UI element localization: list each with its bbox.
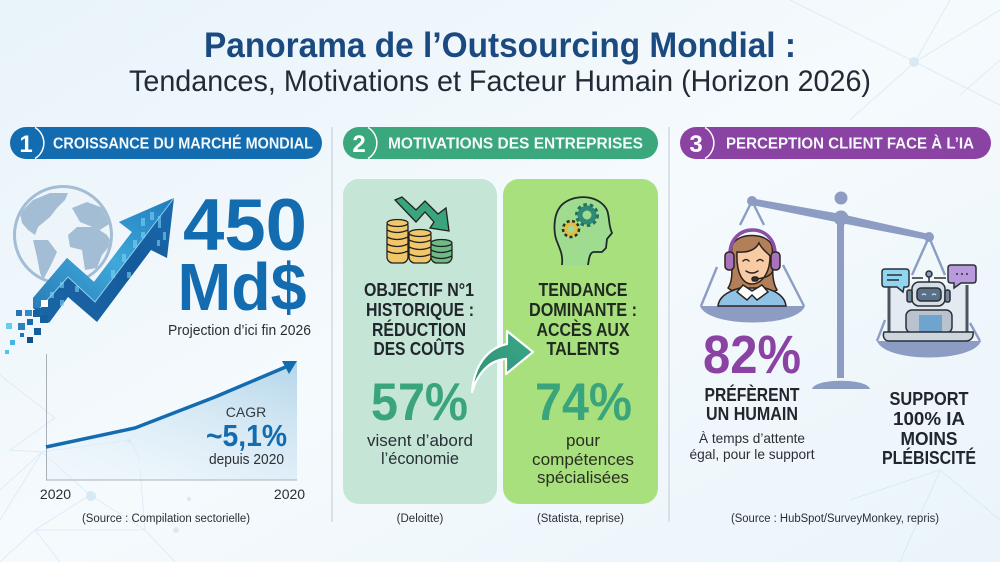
stat: 450 Md$: Projection d’ici fin 2026 bbox=[168, 322, 311, 339]
chart: CAGR growth: depuis 2020 bbox=[209, 452, 284, 468]
text: prefer a human: UN HUMAIN bbox=[706, 404, 798, 424]
header: section 3 bbox=[680, 127, 991, 159]
title bbox=[129, 26, 871, 98]
text: objective: HISTORIQUE : bbox=[366, 300, 474, 320]
text: trend: TALENTS bbox=[546, 339, 620, 359]
stat: 57%: 57% bbox=[371, 373, 468, 432]
source: section 3: (Source : HubSpot/SurveyMonkey, repris) bbox=[731, 513, 939, 525]
stat: 82%: 82% bbox=[703, 325, 801, 385]
header: section 3: PERCEPTION CLIENT FACE À L’IA bbox=[726, 136, 974, 152]
text: objective: DES COÛTS bbox=[374, 338, 464, 359]
chart: CAGR growth: 2020 bbox=[40, 486, 71, 502]
text: 74% description: compétences bbox=[532, 450, 634, 469]
title: Tendances, Motivations et Facteur Humain (Horizon 2026) bbox=[129, 65, 871, 98]
text: 74% description: spécialisées bbox=[537, 468, 629, 487]
chart: CAGR growth: ~5,1% bbox=[206, 418, 287, 453]
stat: 450 Md$: Md$ bbox=[178, 250, 306, 325]
text: prefer a human: égal, pour le support bbox=[690, 446, 815, 462]
text: 57% description: l’économie bbox=[381, 449, 459, 468]
header: section 1 bbox=[10, 127, 322, 159]
header: section 3: 3 bbox=[689, 131, 703, 158]
source: Statista: (Statista, reprise) bbox=[537, 513, 624, 525]
panel: talent access bbox=[503, 179, 658, 504]
chart: balance scale bbox=[700, 192, 981, 389]
text: prefer a human: PRÉFÈRENT bbox=[704, 384, 800, 405]
source: Deloitte: (Deloitte) bbox=[397, 513, 443, 525]
chart: CAGR growth bbox=[40, 354, 305, 502]
stat: 450 Md$: 450 bbox=[183, 185, 307, 266]
icon: human support agent bbox=[718, 230, 786, 306]
text: prefer a human bbox=[690, 384, 815, 462]
header: section 2 bbox=[343, 127, 658, 159]
text: AI support: SUPPORT bbox=[890, 389, 969, 409]
text: objective bbox=[364, 280, 474, 359]
text: trend: ACCÈS AUX bbox=[536, 319, 630, 340]
chart: CAGR growth: 2020 bbox=[274, 486, 305, 502]
icon: rising arrow bbox=[5, 198, 174, 354]
text: objective: OBJECTIF N°1 bbox=[364, 280, 474, 300]
text: 74% description bbox=[532, 431, 634, 487]
stat: 450 Md$ bbox=[168, 185, 311, 339]
text: trend bbox=[529, 280, 637, 359]
chart: CAGR growth: CAGR bbox=[226, 404, 266, 420]
panel: cost reduction bbox=[343, 179, 497, 504]
header: section 1: 1 bbox=[19, 131, 33, 158]
text: prefer a human: À temps d’attente bbox=[699, 430, 805, 446]
text: 74% description: pour bbox=[566, 431, 600, 450]
icon: globe bbox=[14, 186, 112, 284]
icon: coins and falling arrow bbox=[387, 197, 452, 263]
text: objective: RÉDUCTION bbox=[372, 319, 466, 340]
text: 57% description bbox=[367, 431, 473, 468]
text: trend: TENDANCE bbox=[538, 280, 628, 300]
header: section 2: MOTIVATIONS DES ENTREPRISES bbox=[388, 136, 643, 152]
text: AI support: 100% IA bbox=[893, 409, 965, 429]
text: AI support: PLÉBISCITÉ bbox=[882, 447, 976, 468]
title: Panorama de l’Outsourcing Mondial : bbox=[204, 26, 796, 65]
icon: robot on laptop bbox=[882, 265, 976, 341]
text: trend: DOMINANTE : bbox=[529, 300, 637, 320]
text: 57% description: visent d’abord bbox=[367, 431, 473, 450]
icon: head with gears bbox=[554, 197, 612, 265]
header: section 2: 2 bbox=[352, 131, 366, 158]
text: AI support bbox=[882, 389, 976, 468]
arrow: between motivations bbox=[472, 331, 533, 392]
stat: 74%: 74% bbox=[535, 373, 632, 432]
header: section 1: CROISSANCE DU MARCHÉ MONDIAL bbox=[53, 136, 313, 152]
source: section 1: (Source : Compilation sectorielle) bbox=[82, 513, 250, 525]
text: AI support: MOINS bbox=[900, 429, 958, 449]
